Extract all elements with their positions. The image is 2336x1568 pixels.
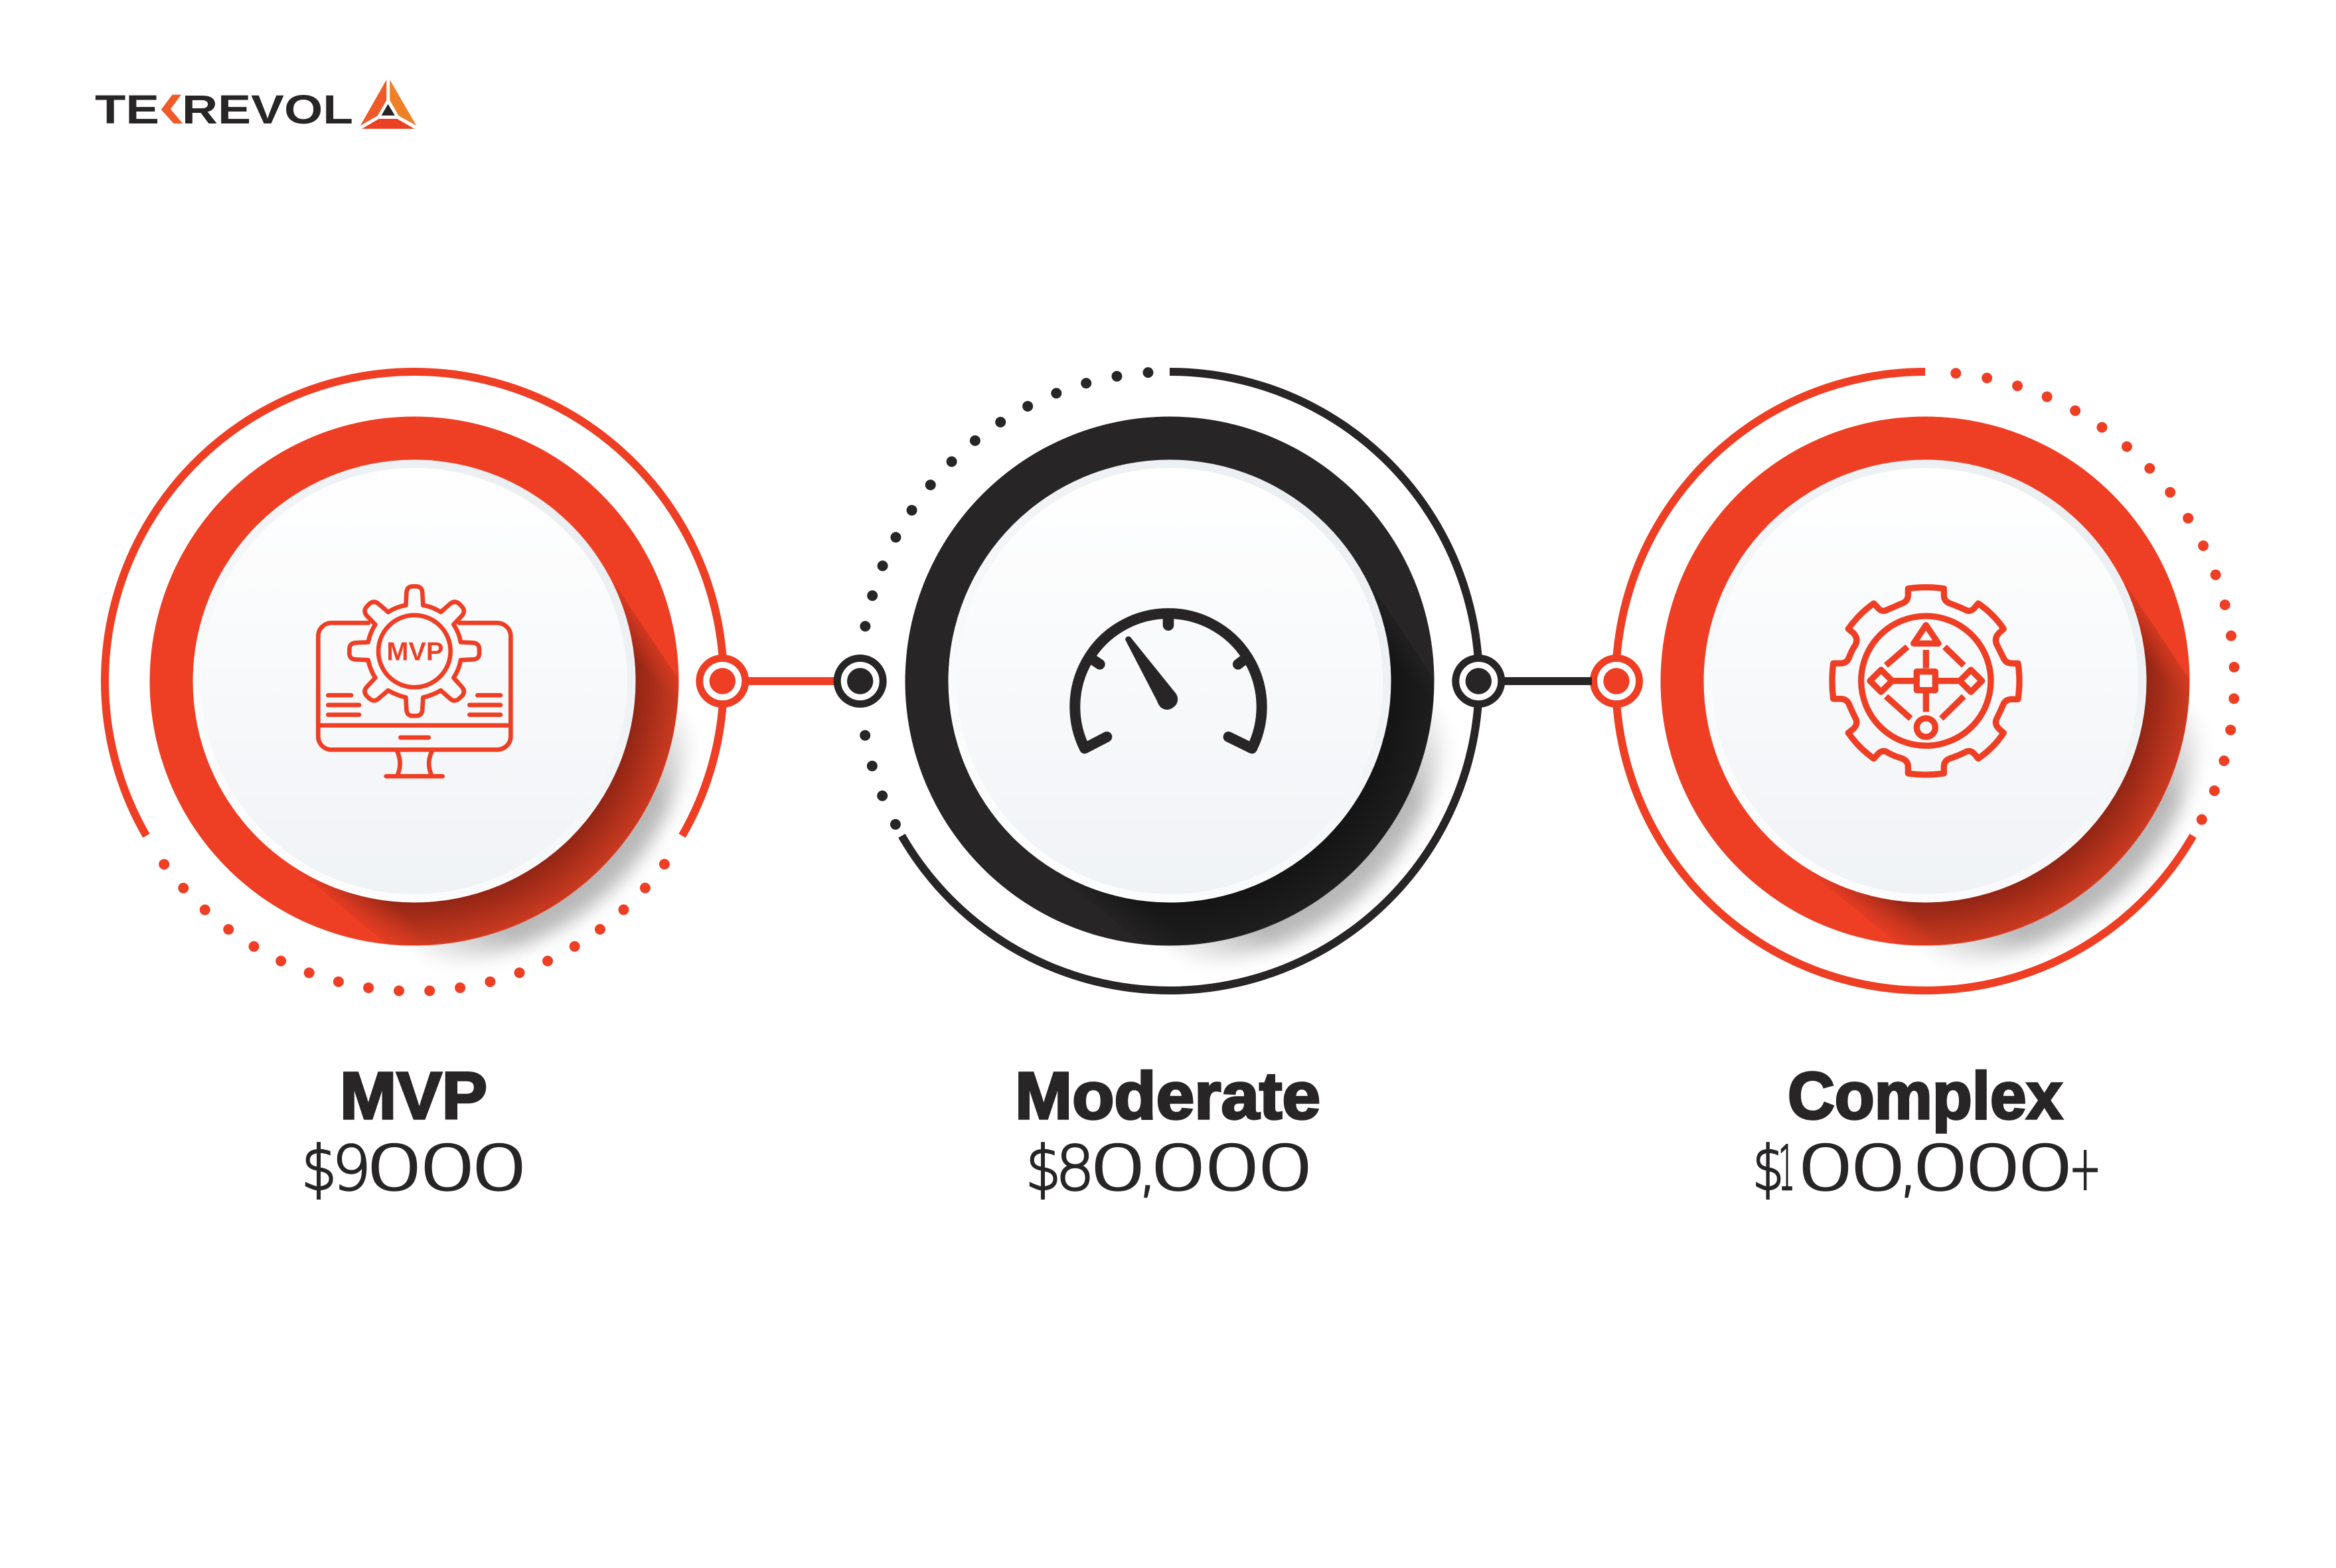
price: MVP: 9 bbox=[332, 1133, 371, 1204]
connector: MVP to Moderate bbox=[700, 659, 883, 704]
outer dotted arc bbox=[1956, 373, 2234, 820]
price: Moderate: 0 bbox=[1148, 1133, 1209, 1204]
outer solid arc bbox=[901, 372, 1479, 990]
heading: Moderate: Moderate bbox=[1015, 1059, 1320, 1133]
heading: Complex: Complex bbox=[1788, 1059, 2063, 1133]
outer dotted arc, upper bbox=[865, 372, 1148, 627]
price: Complex: 0 bbox=[2015, 1133, 2076, 1204]
logo triangle mark bbox=[360, 80, 416, 129]
price: MVP: 0 bbox=[364, 1133, 425, 1204]
price: Moderate: 8 bbox=[1055, 1133, 1095, 1204]
price: Complex bbox=[1752, 1133, 2101, 1204]
price: Moderate: 0 bbox=[1255, 1133, 1316, 1204]
panel: MVP tier bbox=[105, 372, 724, 1133]
outer dotted arc bbox=[164, 864, 664, 991]
price: Complex: + bbox=[2069, 1133, 2101, 1204]
outer dotted arc, lower bbox=[865, 736, 895, 824]
price: MVP: $ bbox=[301, 1133, 337, 1204]
price: Complex: $ bbox=[1752, 1133, 1784, 1204]
price: Moderate: 0 bbox=[1088, 1133, 1148, 1204]
price: Complex: 0 bbox=[1963, 1133, 2023, 1204]
icon: monitor with MVP gear: MVP bbox=[386, 637, 443, 666]
logo: Tekrevol bbox=[95, 80, 416, 132]
logo wordmark bbox=[95, 87, 353, 132]
price: Moderate: , bbox=[1138, 1133, 1158, 1204]
panel: Complex tier bbox=[1616, 372, 2234, 1133]
ring with shaded disc bbox=[150, 417, 693, 963]
outer solid arc bbox=[105, 372, 724, 836]
logo wordmark: TE bbox=[95, 87, 159, 132]
price: Complex: , bbox=[1899, 1133, 1918, 1204]
price: MVP bbox=[301, 1133, 530, 1204]
icon: gear with process diagram bbox=[1832, 588, 2019, 775]
icon: speedometer bbox=[1075, 613, 1262, 748]
price: Complex: 0 bbox=[1796, 1133, 1856, 1204]
price: Complex: 0 bbox=[1848, 1133, 1908, 1204]
ring with shaded disc bbox=[1661, 417, 2204, 963]
price: MVP: 0 bbox=[469, 1133, 530, 1204]
heading: MVP: MVP bbox=[340, 1059, 487, 1133]
outer solid arc bbox=[1616, 372, 2193, 990]
icon: monitor with MVP gear bbox=[318, 586, 510, 776]
price: Moderate: 0 bbox=[1202, 1133, 1263, 1204]
price: MVP: 0 bbox=[418, 1133, 478, 1204]
panel: Moderate tier bbox=[865, 372, 1479, 1133]
price: Complex: 0 bbox=[1910, 1133, 1971, 1204]
ring with shaded disc bbox=[905, 417, 1448, 963]
logo wordmark: REVOL bbox=[182, 87, 353, 132]
price: Complex: 1 bbox=[1778, 1133, 1795, 1204]
connector: Moderate to Complex bbox=[1456, 659, 1640, 704]
price: Moderate bbox=[1026, 1133, 1316, 1204]
price: Moderate: $ bbox=[1026, 1133, 1061, 1204]
